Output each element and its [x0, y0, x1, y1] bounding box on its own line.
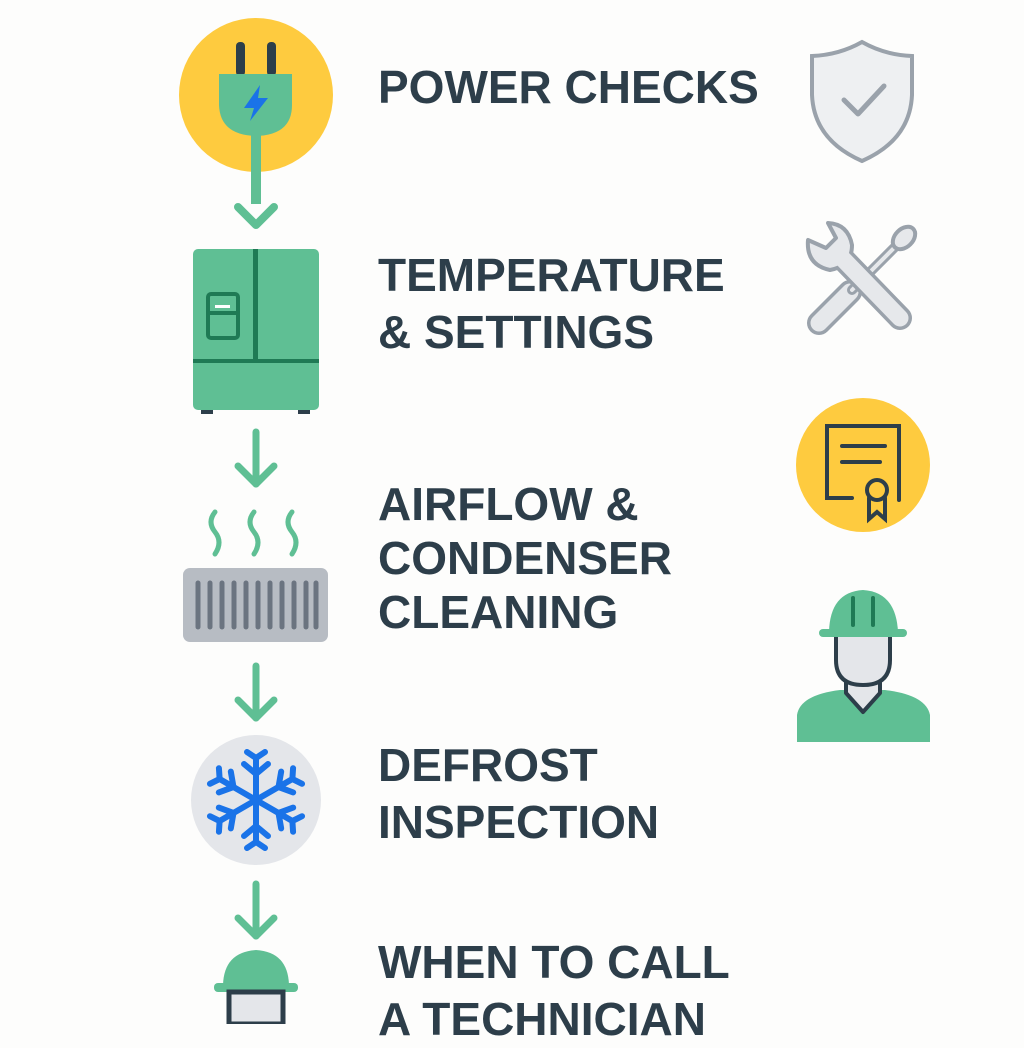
icon: shield [812, 42, 912, 161]
icon: condenser vent [183, 512, 328, 642]
arrow 4 [238, 884, 274, 936]
heading: airflow & condenser cleaning: AIRFLOW & [378, 478, 639, 530]
heading: airflow & condenser cleaning [378, 478, 672, 638]
heading: temperature & settings: TEMPERATURE [378, 249, 725, 301]
arrow 1 [238, 207, 274, 225]
heading: temperature & settings [378, 249, 725, 358]
heading: when to call a technician: WHEN TO CALL [378, 936, 730, 988]
heading: defrost inspection [378, 739, 659, 848]
icon: technician [797, 590, 930, 742]
icon: plug [179, 18, 333, 204]
heading: defrost inspection: DEFROST [378, 739, 598, 791]
icon: tools [808, 222, 920, 323]
heading: when to call a technician: A TECHNICIAN [378, 993, 706, 1045]
arrow 2 [238, 432, 274, 484]
icon: technician bottom [214, 950, 298, 1024]
heading: temperature & settings: & SETTINGS [378, 306, 654, 358]
heading: power checks: POWER CHECKS [378, 61, 759, 113]
heading: airflow & condenser cleaning: CONDENSER [378, 532, 672, 584]
icon: snowflake [191, 735, 321, 865]
arrow 3 [238, 666, 274, 718]
heading: defrost inspection: INSPECTION [378, 796, 659, 848]
icon: fridge [193, 249, 319, 414]
heading: airflow & condenser cleaning: CLEANING [378, 586, 618, 638]
heading: when to call a technician [378, 936, 730, 1045]
icon: certificate [796, 398, 930, 532]
